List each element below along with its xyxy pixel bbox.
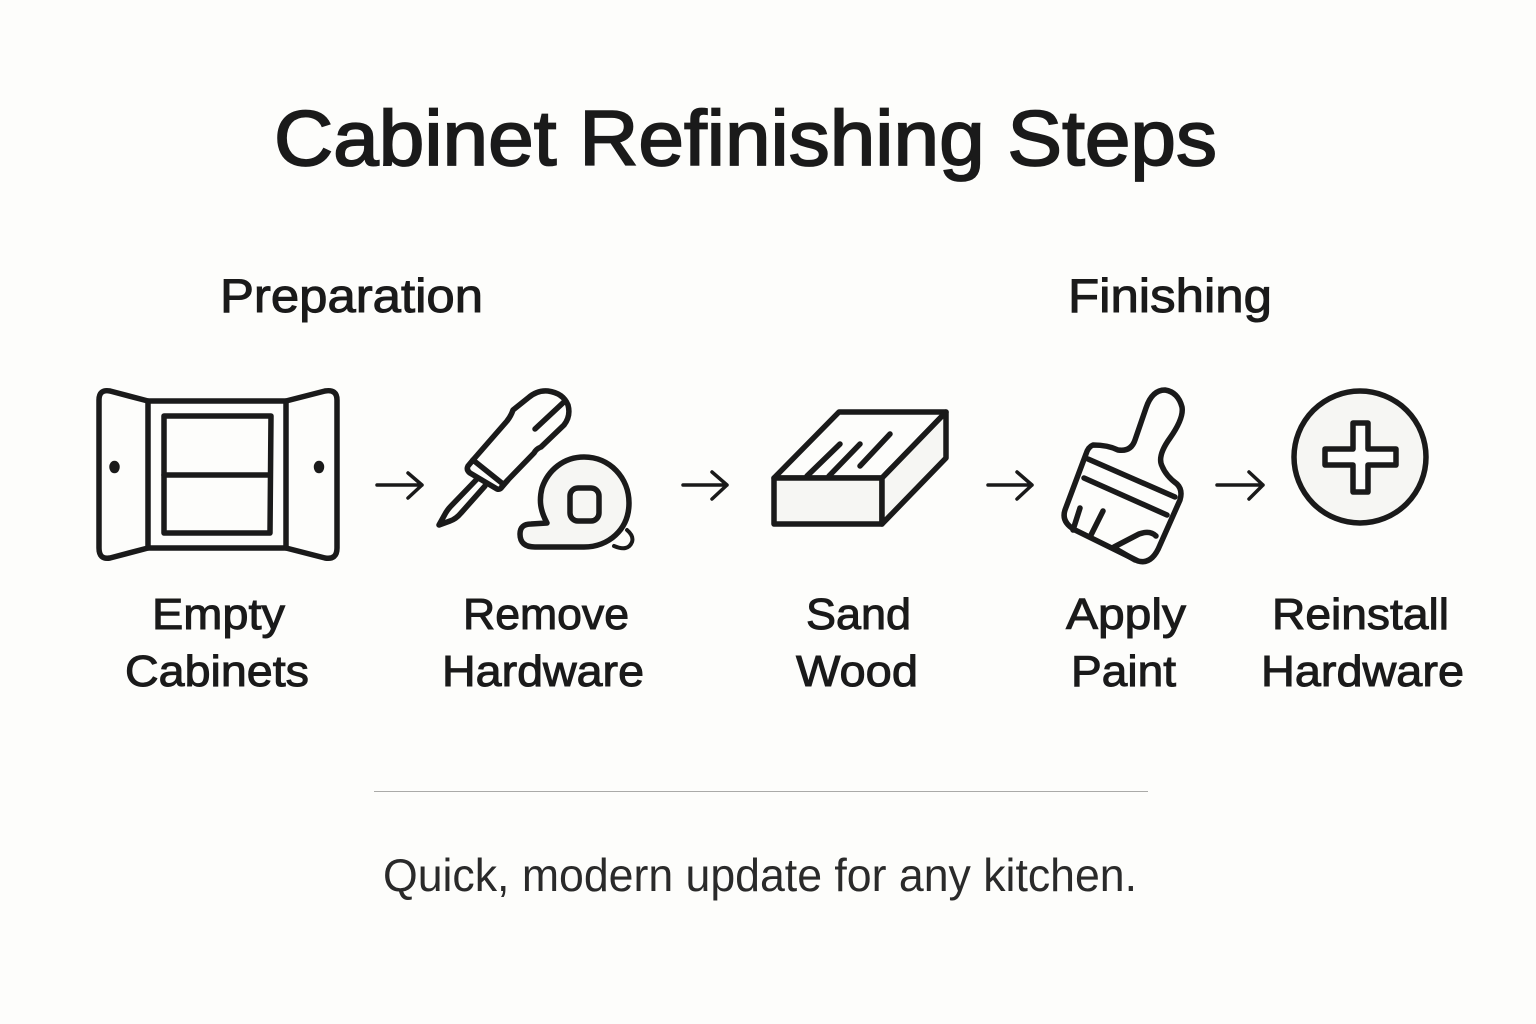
heading: Preparation: Preparation [220, 269, 483, 322]
tagline: Quick, modern update for any kitchen. [383, 849, 1137, 901]
arrow 2 [683, 472, 727, 499]
label: Remove Hardware: Remove [463, 590, 629, 639]
label: Reinstall Hardware: Hardware [1261, 647, 1464, 696]
label: Remove Hardware: Hardware [442, 647, 644, 696]
label: Reinstall Hardware [1261, 590, 1464, 696]
icon: open cabinet [99, 391, 337, 558]
icon: screwdriver and tape measure [439, 391, 632, 548]
label: Reinstall Hardware: Reinstall [1272, 590, 1449, 639]
title: Cabinet Refinishing Steps [274, 94, 1217, 182]
label: Apply Paint [1066, 590, 1186, 696]
icon: paint brush [1064, 390, 1182, 562]
arrow 4 [1217, 472, 1263, 499]
label: Remove Hardware [442, 590, 644, 696]
label: Sand Wood: Wood [796, 647, 918, 696]
icon: sanding block [774, 412, 946, 524]
arrow 1 [377, 473, 422, 498]
arrow 3 [988, 472, 1032, 499]
icon: plus-head screw [1294, 391, 1426, 523]
label: Apply Paint: Paint [1071, 647, 1176, 696]
label: Empty Cabinets: Cabinets [125, 647, 309, 696]
label: Sand Wood: Sand [806, 590, 911, 639]
label: Sand Wood [796, 590, 918, 696]
heading: Finishing: Finishing [1068, 269, 1272, 322]
label: Empty Cabinets: Empty [152, 590, 285, 639]
label: Apply Paint: Apply [1066, 590, 1186, 639]
label: Empty Cabinets [125, 590, 309, 696]
